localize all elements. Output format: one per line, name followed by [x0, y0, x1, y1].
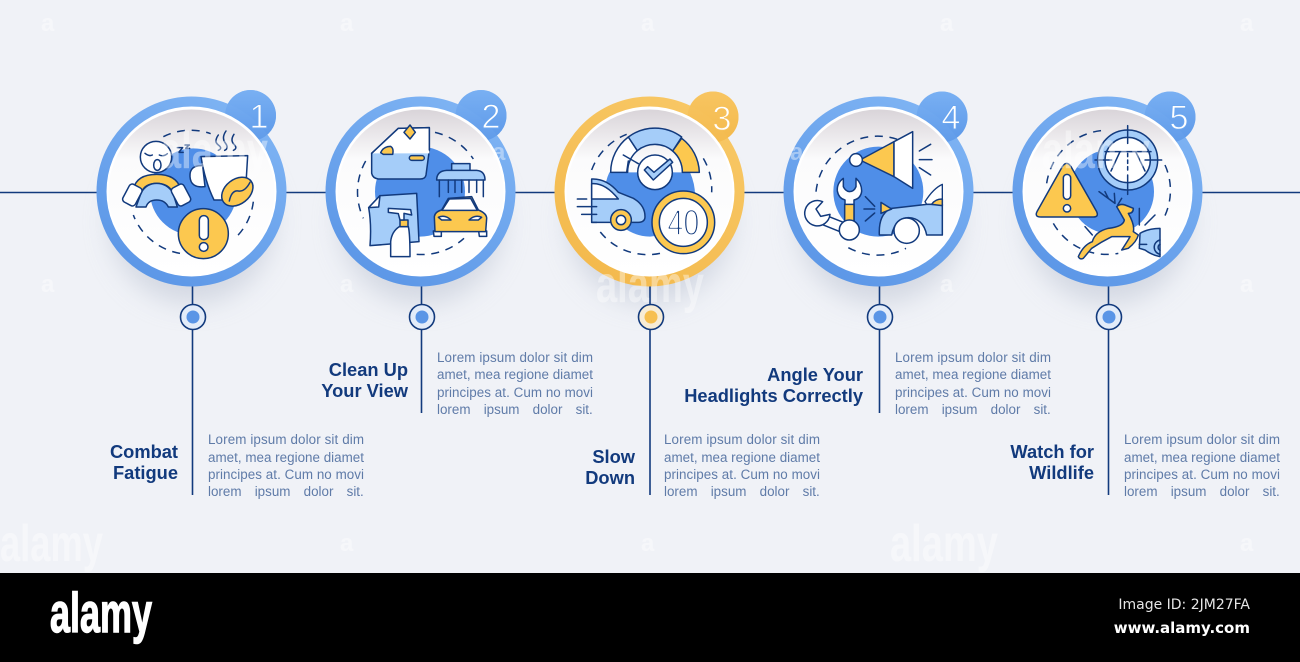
body text: [208, 432, 364, 499]
watermarks: a: [790, 139, 804, 166]
title: Wildlife: [1029, 462, 1094, 483]
body text: principes at. Cum no movi: [664, 467, 820, 482]
watermarks: a: [41, 10, 55, 37]
title: Down: [585, 467, 635, 488]
number 4: 4: [942, 99, 960, 137]
icon: speed gauge, car and limit sign: 40: [667, 202, 699, 243]
body text: amet, mea regione diamet: [664, 450, 820, 465]
step 5: watch for wildlife: [1010, 92, 1280, 499]
body text: Lorem ipsum dolor sit dim: [895, 350, 1051, 365]
number 2: 2: [482, 98, 500, 136]
title: Clean Up: [329, 359, 408, 380]
body text: principes at. Cum no movi: [895, 385, 1051, 400]
shadow: [1026, 140, 1190, 304]
watermarks: alamy: [0, 515, 103, 573]
shadow: [110, 140, 274, 304]
connector and node: [868, 284, 892, 413]
title: Watch for: [1010, 441, 1094, 462]
ring badge: [326, 90, 516, 286]
body text: lorem ipsum dolor sit.: [1124, 484, 1280, 499]
title: [1010, 441, 1094, 483]
watermarks: a: [41, 271, 55, 298]
body text: amet, mea regione diamet: [208, 450, 364, 465]
title: [684, 364, 864, 406]
watermarks: alamy: [160, 122, 268, 180]
step 3: slow down: [554, 92, 820, 499]
title: Slow: [592, 446, 636, 467]
shadow: [568, 140, 732, 304]
ring badge: [1012, 92, 1202, 286]
watermarks: a: [1240, 530, 1254, 557]
connector and node: [1096, 284, 1122, 495]
title: [321, 359, 409, 401]
website: www.alamy.com: [1114, 619, 1250, 637]
body text: amet, mea regione diamet: [1124, 450, 1280, 465]
watermarks: a: [340, 530, 354, 557]
watermarks: a: [641, 10, 655, 37]
title: Fatigue: [113, 462, 178, 483]
watermarks: a: [340, 10, 354, 37]
footer band: [0, 573, 1300, 662]
connector and node: [410, 284, 434, 413]
body text: principes at. Cum no movi: [1124, 467, 1280, 482]
watermarks: a: [1240, 271, 1254, 298]
step 2: clean up your view: [321, 90, 593, 417]
icon: scope, warning sign, deer and car: [1036, 126, 1170, 259]
connector and node: [180, 284, 206, 495]
title: [585, 446, 636, 488]
body text: lorem ipsum dolor sit.: [664, 484, 820, 499]
step 1: combat fatigue: [96, 90, 364, 499]
title: Your View: [321, 380, 409, 401]
body text: [1124, 432, 1280, 499]
title: Angle Your: [767, 364, 863, 385]
watermarks: a: [641, 530, 655, 557]
body text: [437, 350, 593, 417]
body text: lorem ipsum dolor sit.: [895, 402, 1051, 417]
ring badge: [554, 92, 744, 286]
image id: Image ID: 2JM27FA: [1118, 597, 1250, 613]
body text: Lorem ipsum dolor sit dim: [664, 432, 820, 447]
number 3: 3: [713, 100, 731, 138]
shadow: [339, 140, 503, 304]
ring badge: [784, 92, 974, 286]
title: Combat: [110, 441, 178, 462]
watermarks: a: [940, 271, 954, 298]
horizontal timeline: [0, 192, 1300, 194]
ring badge: [96, 90, 286, 286]
body text: principes at. Cum no movi: [208, 467, 364, 482]
body text: lorem ipsum dolor sit.: [208, 484, 364, 499]
body text: lorem ipsum dolor sit.: [437, 402, 593, 417]
watermarks: alamy: [1042, 122, 1150, 180]
body text: [895, 350, 1051, 417]
body text: amet, mea regione diamet: [895, 367, 1051, 382]
body text: Lorem ipsum dolor sit dim: [437, 350, 593, 365]
body text: [664, 432, 820, 499]
watermarks: a: [492, 139, 506, 166]
number 5: 5: [1170, 99, 1188, 137]
watermarks: a: [340, 271, 354, 298]
connector and node: [638, 284, 664, 495]
footer logo: alamy: [50, 581, 152, 644]
watermarks: a: [940, 10, 954, 37]
watermarks: a: [1240, 10, 1254, 37]
number 1: 1: [250, 98, 268, 136]
title: [110, 441, 178, 483]
body text: Lorem ipsum dolor sit dim: [1124, 432, 1280, 447]
icon: sleepy driver with coffee and alert: [121, 130, 259, 259]
body text: Lorem ipsum dolor sit dim: [208, 432, 364, 447]
step 4: angle your headlights correctly: [684, 92, 1051, 417]
body text: amet, mea regione diamet: [437, 367, 593, 382]
shadow: [797, 140, 961, 304]
icon: car door, wash and spray: [358, 125, 487, 257]
title: Headlights Correctly: [684, 385, 864, 406]
icon: speed gauge, car and limit sign: [577, 128, 715, 255]
watermarks: alamy: [890, 515, 998, 573]
icon: headlight beam, wrenches and car: [805, 132, 942, 255]
body text: principes at. Cum no movi: [437, 385, 593, 400]
watermarks: alamy: [596, 256, 704, 314]
